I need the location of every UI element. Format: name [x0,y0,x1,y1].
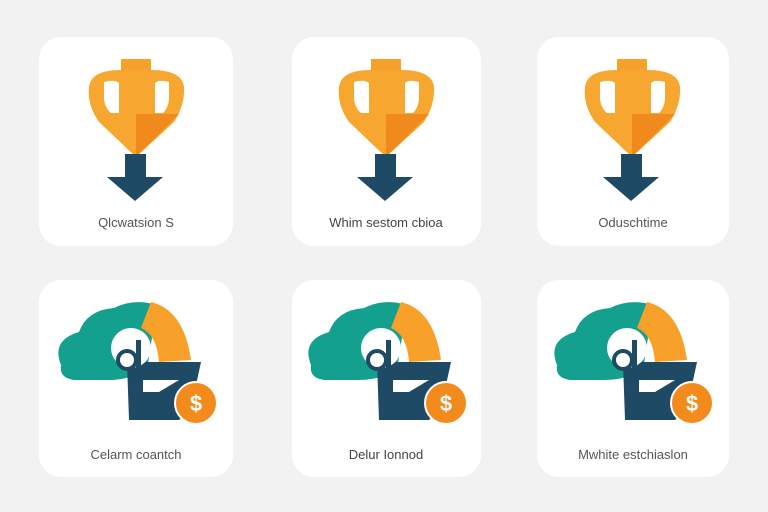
label: Qlcwatsion S [98,215,174,230]
icon: cloud coin [554,302,713,424]
icon: trophy arrow [339,59,434,201]
icon: trophy arrow [89,59,184,201]
icon: trophy arrow [585,59,680,201]
card: bottom left [39,280,233,477]
icon: cloud coin [308,302,467,424]
label: Delur Ionnod [349,447,423,462]
card: bottom right [537,280,729,477]
label: Celarm coantch [90,447,182,462]
card: top middle [292,37,481,246]
label: Mwhite estchiaslon [578,447,688,462]
label: Oduschtime [598,215,668,230]
card: bottom middle [292,280,481,477]
label: Whim sestom cbioa [329,215,443,230]
icon: cloud coin [58,302,217,424]
card: top right [537,37,729,246]
card: top left [39,37,233,246]
